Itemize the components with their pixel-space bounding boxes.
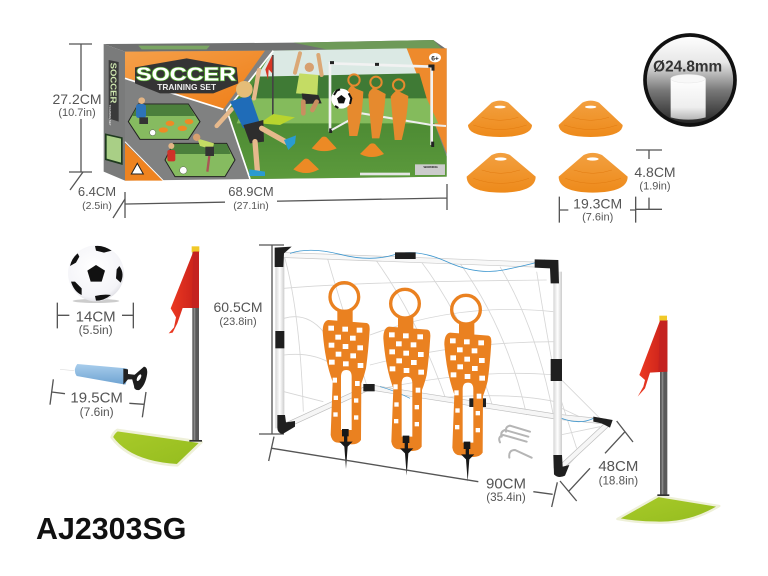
dimension: box height 27.2CM: 27.2CM <box>52 91 102 107</box>
dimension: goal width 90CM: (35.4in) <box>486 491 526 504</box>
dimension: cone width 19.3CM <box>559 195 636 224</box>
dimension: ball 14CM <box>57 303 133 337</box>
box side panel: SOCCER <box>108 63 118 103</box>
box age badge and warning: 6+ <box>431 55 439 62</box>
dimension: ball 14CM: (5.5in) <box>79 323 113 337</box>
cone top left <box>468 101 532 137</box>
left accessories <box>50 245 202 465</box>
dimension: box width 68.9CM: (27.1in) <box>233 200 269 212</box>
dimension: goal depth 48CM <box>560 421 638 501</box>
goal frame <box>275 247 613 477</box>
corner flag right <box>617 316 719 523</box>
corner flag left <box>112 246 202 465</box>
cone bottom right <box>559 153 628 193</box>
icon: air pump <box>60 364 147 390</box>
cone top right <box>559 101 623 137</box>
box side panel <box>104 44 125 181</box>
box boy kicking <box>217 70 296 176</box>
dimension: pump 19.5CM: (7.6in) <box>80 405 114 419</box>
dimension: cone height 4.8CM: (1.9in) <box>639 180 671 192</box>
dimension: goal height 60.5CM: (23.8in) <box>219 316 257 328</box>
dimension: pump 19.5CM <box>50 379 146 419</box>
box age badge and warning: WARNING <box>423 165 439 169</box>
dimension: box height 27.2CM: (10.7in) <box>58 107 96 119</box>
dimension: box width 68.9CM: 68.9CM <box>228 184 274 199</box>
box side panel: TRAINING SET <box>108 105 112 126</box>
dimension: box height 27.2CM <box>52 44 102 172</box>
pipe diameter badge <box>645 35 735 125</box>
dimension: ball 14CM: 14CM <box>76 308 116 325</box>
dimension: cone height 4.8CM <box>634 150 676 209</box>
training dummy middle <box>383 289 430 476</box>
box logo: soccer training set <box>135 58 238 93</box>
training dummy left <box>323 283 370 469</box>
dimension: goal height 60.5CM: 60.5CM <box>214 299 262 315</box>
dimension: goal height 60.5CM <box>211 245 284 434</box>
dimension: box depth 6.4CM: 6.4CM <box>78 184 116 199</box>
goal net <box>284 255 607 465</box>
box front face <box>125 48 447 181</box>
icon: soccer ball <box>68 245 124 303</box>
box logo: soccer training set: TRAINING SET <box>157 82 216 92</box>
dimension: box depth 6.4CM <box>70 172 125 218</box>
box cones <box>293 137 384 173</box>
dimension: goal depth 48CM: 48CM <box>598 458 638 475</box>
box logo: soccer training set: SOCCER <box>136 64 237 85</box>
dimension: cone height 4.8CM: 4.8CM <box>634 164 676 180</box>
dimension: goal width 90CM <box>269 437 557 507</box>
dimension: cone width 19.3CM: 19.3CM <box>573 195 622 211</box>
box inset photos <box>128 97 235 177</box>
dimension: box width 68.9CM <box>125 184 447 218</box>
box goal with dummies <box>330 63 446 147</box>
cone bottom left <box>467 153 536 193</box>
box man jumping <box>295 53 322 113</box>
ground pegs <box>499 426 532 458</box>
cones group <box>467 35 735 224</box>
dimension: box depth 6.4CM: (2.5in) <box>82 200 112 212</box>
model number: AJ2303SG <box>36 512 186 546</box>
product box <box>104 40 447 181</box>
pipe diameter badge: Ø24.8mm <box>653 59 722 76</box>
dimension: goal depth 48CM: (18.8in) <box>599 474 638 487</box>
box corner flag <box>259 55 295 125</box>
box age badge and warning <box>131 53 445 175</box>
goal assembly <box>211 245 638 507</box>
box top face <box>104 40 447 52</box>
training dummy right <box>444 295 491 482</box>
dimension: pump 19.5CM: 19.5CM <box>70 390 123 407</box>
dimension: cone width 19.3CM: (7.6in) <box>582 212 613 224</box>
dimension: goal width 90CM: 90CM <box>486 476 526 493</box>
